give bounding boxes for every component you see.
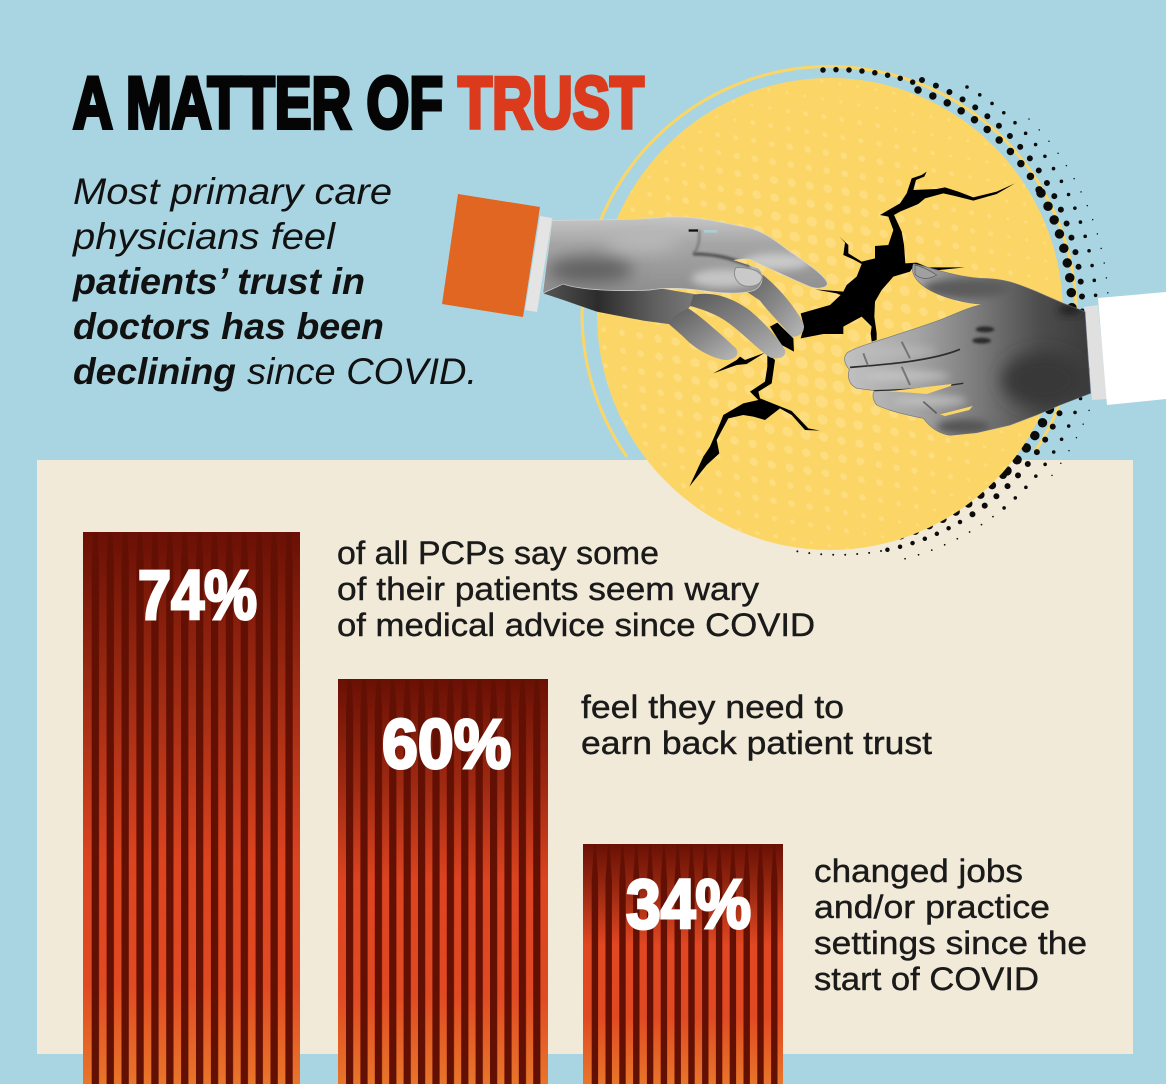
text: 74% description: of their patients seem wary: [337, 571, 759, 607]
intro text: doctors has been: [73, 306, 384, 347]
yellow ring around circle: [582, 66, 1076, 457]
text: 60% description: [581, 689, 932, 761]
intro text: Most primary care: [73, 171, 392, 212]
crack in the circle: [689, 172, 1015, 487]
title: A MATTER OF: [73, 63, 443, 144]
bar: 60%: 60%: [382, 705, 511, 783]
text: 34% description: start of COVID: [814, 961, 1039, 997]
text: 60% description: earn back patient trust: [581, 725, 932, 761]
text: 34% description: [814, 853, 1087, 997]
palm of left hand: [543, 280, 700, 324]
ring finger: [690, 294, 785, 358]
bar: 60%: [338, 679, 548, 1084]
thumbnail: [734, 267, 762, 286]
bar: 34%: [583, 844, 783, 1084]
text: 74% description: [337, 535, 815, 643]
right hand reaching: [845, 264, 1091, 435]
left sleeve: orange: [442, 194, 540, 317]
intro text: declining: [73, 351, 236, 392]
scuff on knuckle: [689, 229, 717, 233]
right hand shading: [850, 265, 1085, 434]
left hand reaching: [543, 217, 827, 360]
intro text: physicians feel: [72, 216, 337, 257]
left hand shading: [547, 228, 810, 288]
bar: 34%: 34%: [626, 865, 751, 943]
text: 74% description: of all PCPs say some: [337, 535, 659, 571]
intro text: since COVID.: [247, 351, 477, 392]
pinky finger: [667, 308, 737, 360]
text: 60% description: feel they need to: [581, 689, 844, 725]
panel: statistics background: [37, 460, 1133, 1054]
text: 34% description: changed jobs: [814, 853, 1023, 889]
black halftone dots: [795, 70, 1108, 560]
right cuff: [1084, 305, 1107, 400]
middle finger: [747, 263, 804, 337]
text: 34% description: settings since the: [814, 925, 1087, 961]
intro text: [72, 171, 477, 392]
gaps between the fingers: [888, 384, 952, 394]
title: TRUST: [458, 63, 644, 144]
intro text: patients’ trust in: [72, 261, 365, 302]
yellow circle with halftone pattern: [590, 78, 1063, 550]
bar: 74%: [83, 532, 300, 1084]
back of hand, thumb and index finger: [543, 217, 827, 293]
right sleeve: white: [1098, 292, 1166, 405]
text: 74% description: of medical advice since COVID: [337, 607, 815, 643]
left cuff: [525, 216, 552, 312]
bar: 74%: 74%: [138, 556, 257, 634]
text: 34% description: and/or practice: [814, 889, 1050, 925]
